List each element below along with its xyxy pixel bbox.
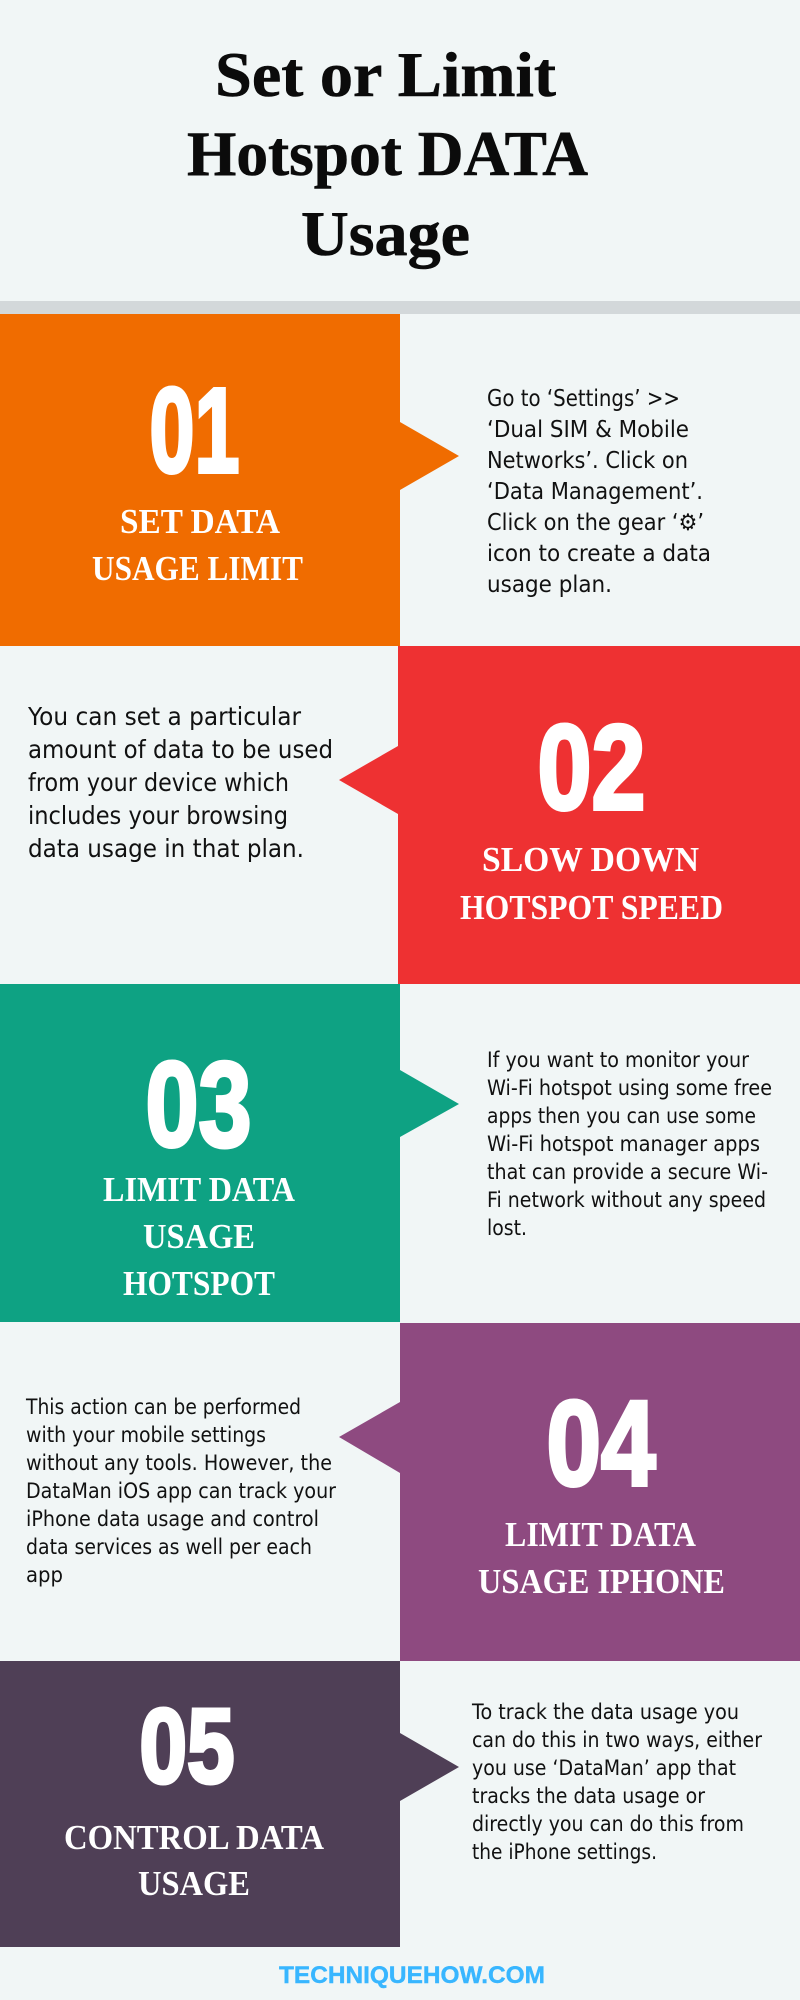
body text 04: iPhone data usage and control <box>26 1507 319 1531</box>
body text 04: with your mobile settings <box>26 1423 266 1447</box>
body text 01 <box>487 386 711 598</box>
title: Usage <box>301 199 470 269</box>
body text 01: usage plan. <box>487 572 612 598</box>
heading: control data usage: CONTROL DATA <box>64 1818 325 1857</box>
heading: control data usage <box>64 1818 325 1903</box>
body text 03: that can provide a secure Wi- <box>487 1160 768 1184</box>
heading: limit data usage iphone: USAGE IPHONE <box>478 1562 725 1601</box>
body text 04: app <box>26 1563 63 1587</box>
body text 01: ‘Dual SIM & Mobile <box>487 417 689 443</box>
body text 04: without any tools. However, the <box>26 1451 332 1475</box>
body text 02: amount of data to be used <box>28 735 333 764</box>
heading: limit data usage hotspot <box>103 1170 296 1303</box>
dark block with arrow <box>0 1661 459 1947</box>
body text 05: To track the data usage you <box>471 1700 739 1724</box>
body text 01: ‘Data Management’. <box>487 479 703 505</box>
body text 05: tracks the data usage or <box>472 1784 705 1808</box>
body text 03 <box>487 1048 772 1240</box>
footer: source website: TECHNIQUEHOW.COM <box>279 1962 545 1989</box>
panel: step 02 <box>27 646 800 984</box>
body text 03: apps then you can use some <box>487 1104 756 1128</box>
body text 05: the iPhone settings. <box>472 1840 657 1864</box>
body text 03: Wi-Fi hotspot using some free <box>487 1076 772 1100</box>
heading: slow down hotspot speed: HOTSPOT SPEED <box>460 888 723 927</box>
body text 04 <box>25 1395 336 1587</box>
heading: limit data usage iphone: LIMIT DATA <box>505 1515 697 1554</box>
body text 02: from your device which <box>28 768 289 797</box>
heading: slow down hotspot speed: SLOW DOWN <box>482 840 699 879</box>
body text 01: icon to create a data <box>487 541 711 567</box>
heading: set data usage limit: SET DATA <box>120 502 281 541</box>
body text 05: directly you can do this from <box>472 1812 744 1836</box>
title <box>187 40 588 269</box>
title: Hotspot DATA <box>187 119 588 189</box>
body text 03: Fi network without any speed <box>487 1188 766 1212</box>
body text 05: can do this in two ways, either <box>472 1728 762 1752</box>
heading: limit data usage hotspot: HOTSPOT <box>123 1264 275 1303</box>
red block with arrow <box>339 646 800 984</box>
body text 01: Networks’. Click on <box>487 448 688 474</box>
body text 02 <box>27 702 333 863</box>
number 05: 05 <box>140 1688 234 1806</box>
heading: limit data usage hotspot: USAGE <box>143 1217 255 1256</box>
panel: step 05 <box>0 1661 762 1947</box>
number 03: 03 <box>146 1036 252 1172</box>
body text 02: includes your browsing <box>28 801 288 830</box>
purple block with arrow <box>339 1323 800 1661</box>
body text 01: Click on the gear ‘⚙’ <box>487 510 704 536</box>
number 01: 01 <box>150 362 240 498</box>
heading: control data usage: USAGE <box>138 1864 250 1903</box>
body text 04: This action can be performed <box>25 1395 301 1419</box>
body text 04: DataMan iOS app can track your <box>26 1479 336 1503</box>
panel: step 03 <box>0 984 772 1322</box>
body text 02: You can set a particular <box>27 702 302 731</box>
heading: limit data usage hotspot: LIMIT DATA <box>103 1170 296 1209</box>
panel: step 04 <box>25 1323 800 1661</box>
number 02: 02 <box>538 699 646 835</box>
heading: limit data usage iphone <box>478 1515 725 1601</box>
title: Set or Limit <box>215 40 556 110</box>
orange block with arrow <box>0 314 459 646</box>
body text 05 <box>471 1700 762 1864</box>
heading: set data usage limit: USAGE LIMIT <box>92 549 303 588</box>
body text 02: data usage in that plan. <box>28 834 304 863</box>
body text 03: Wi-Fi hotspot manager apps <box>487 1132 760 1156</box>
body text 04: data services as well per each <box>26 1535 312 1559</box>
body text 03: If you want to monitor your <box>487 1048 749 1072</box>
body text 05: you use ‘DataMan’ app that <box>472 1756 736 1780</box>
panel: step 01 <box>0 314 711 646</box>
heading: slow down hotspot speed <box>460 840 723 927</box>
green block with arrow <box>0 984 459 1322</box>
body text 03: lost. <box>487 1216 527 1240</box>
heading: set data usage limit <box>92 502 303 588</box>
body text 01: Go to ‘Settings’ >> <box>487 386 680 412</box>
number 04: 04 <box>546 1375 656 1511</box>
